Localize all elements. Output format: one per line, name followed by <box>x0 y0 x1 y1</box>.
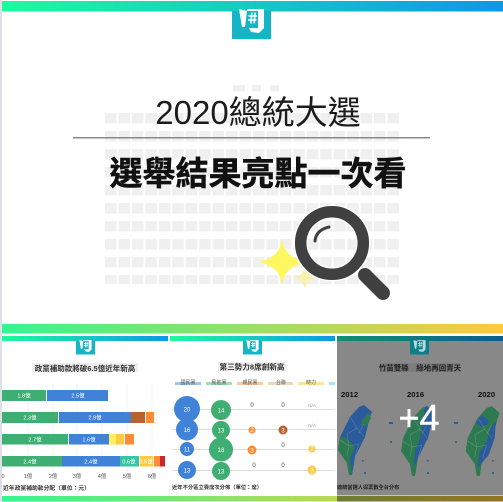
bar chart: 2.3億 <box>23 414 37 422</box>
card background <box>337 336 503 496</box>
zero and N/A values <box>250 403 316 469</box>
bubbles: 2 <box>310 447 314 453</box>
bubbles: 3 <box>250 448 254 454</box>
icon: magnifying glass <box>301 212 383 293</box>
panel: subsidy stacked bars <box>1 336 168 495</box>
more-count overlay label: +4 <box>398 397 440 438</box>
bubbles: 11 <box>184 448 191 454</box>
zero and N/A values: 0 <box>281 403 285 409</box>
logo badge <box>243 340 262 354</box>
x axis labels: 0 <box>1 474 5 480</box>
x axis labels <box>1 472 157 480</box>
card top band <box>337 336 503 341</box>
seat grid background <box>105 85 401 284</box>
subtitle: 選舉結果亮點一次看 <box>110 155 406 192</box>
grid lines <box>28 384 152 472</box>
bubbles: 13 <box>218 428 225 434</box>
bubbles: 18 <box>218 448 225 454</box>
card background <box>170 336 335 495</box>
bar chart <box>2 390 165 466</box>
bar chart: 2.5億 <box>71 392 85 400</box>
bar chart: 0.6億 <box>122 458 136 466</box>
zero and N/A values: 0 <box>281 443 285 449</box>
x axis labels: 4億 <box>98 472 107 480</box>
year labels: 2020 <box>478 390 495 399</box>
party header chips <box>175 379 335 386</box>
chart caption: 近年政黨補助款分配（單位：元） <box>3 484 90 492</box>
logo badge <box>232 9 271 39</box>
bubbles: 2 <box>250 428 254 434</box>
dimmed bottom band <box>337 496 503 502</box>
bubbles: 20 <box>184 408 191 414</box>
panel: cover header <box>2 1 503 39</box>
card heading: 第三勢力8席創新高 <box>220 362 285 372</box>
bar chart: 2.4億 <box>23 458 37 466</box>
chart caption: 近年不分區立委席次分佈（單位：席） <box>172 483 262 491</box>
zero and N/A values: N/A <box>308 403 316 408</box>
icon: sparkles <box>261 241 316 289</box>
map: 2012 <box>338 405 372 475</box>
party header chips: 時力 <box>306 379 316 386</box>
outlying islands <box>362 422 494 474</box>
top gradient band <box>2 1 503 12</box>
page background edge <box>0 0 2 502</box>
zero and N/A values: 0 <box>250 403 254 409</box>
chart caption: 總統當選人得票數全台分布 <box>337 483 399 491</box>
card background <box>2 336 168 495</box>
title: 2020總統大選 <box>155 94 361 131</box>
title divider <box>73 137 430 138</box>
bar chart: 1.6億 <box>82 436 96 444</box>
zero and N/A values: N/A <box>308 423 316 428</box>
year labels: 2016 <box>407 390 424 399</box>
card heading: 竹苗雙縣 綠地再回青天 <box>379 362 462 372</box>
zero and N/A values: 0 <box>252 463 256 469</box>
map: 2016 <box>401 406 435 476</box>
party header chips: 台聯 <box>276 379 286 386</box>
map: 2020 <box>466 406 500 476</box>
zero and N/A values: 0 <box>281 463 285 469</box>
bubbles: 13 <box>218 470 225 476</box>
x axis labels: 2億 <box>49 472 58 480</box>
card heading: 政黨補助款將破6.5億近年新高 <box>35 363 136 373</box>
party header chips: 國民黨 <box>180 379 196 386</box>
logo badge <box>410 340 429 354</box>
bubbles: 14 <box>218 408 225 414</box>
gradient band: cards top <box>2 324 503 334</box>
party header chips: 親民黨 <box>242 379 258 386</box>
bar chart: 1.8億 <box>17 392 31 400</box>
x axis labels: 5億 <box>123 472 132 480</box>
bar chart: 0.5億 <box>139 458 153 466</box>
bar chart: 2.9億 <box>88 414 102 422</box>
card top band <box>2 336 168 341</box>
party header chips: 民進黨 <box>211 379 227 386</box>
year labels: 2012 <box>341 390 358 399</box>
card top band <box>170 336 335 341</box>
bar chart: 2.4億 <box>84 458 98 466</box>
panel: third force bubble chart <box>170 336 335 495</box>
logo badge <box>76 340 95 354</box>
bubbles: 13 <box>184 468 191 474</box>
gradient band: cards bottom <box>2 496 503 502</box>
x axis labels: 3億 <box>73 472 82 480</box>
bubbles <box>174 396 316 480</box>
year labels <box>341 390 495 399</box>
x axis labels: 6億 <box>148 472 157 480</box>
panel: county maps with overlay <box>337 336 503 502</box>
bar chart: 2.7億 <box>28 436 42 444</box>
bubbles: 3 <box>310 468 314 474</box>
bubbles: 16 <box>184 428 191 434</box>
x axis labels: 1億 <box>24 472 33 480</box>
bubbles: 3 <box>281 428 285 434</box>
row lines <box>172 410 335 470</box>
